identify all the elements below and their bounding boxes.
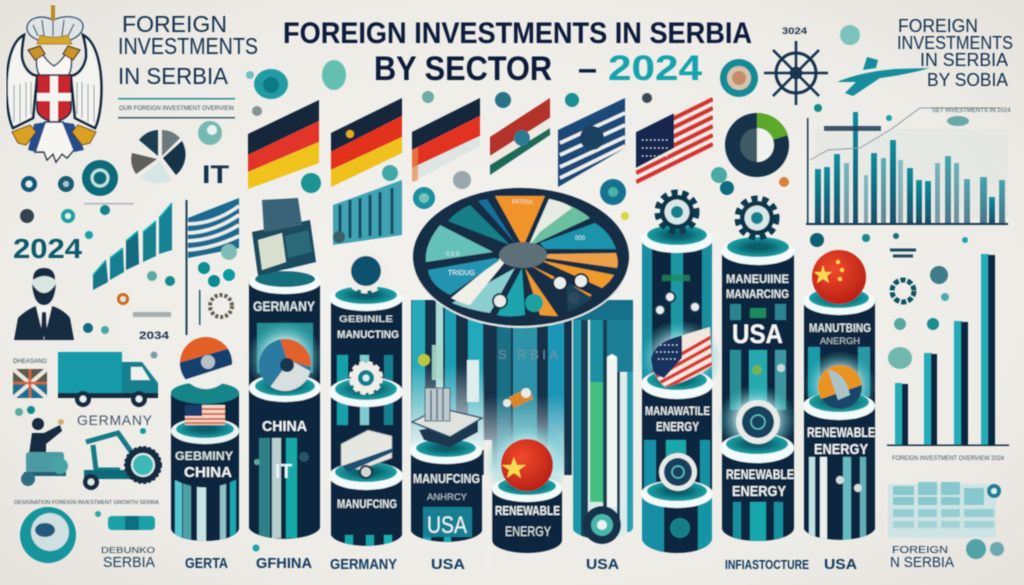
column 9: China manufacturing renewable xyxy=(803,250,876,550)
heading: main title xyxy=(283,17,752,88)
disc xyxy=(413,190,629,328)
labels: bottom sector row xyxy=(185,555,857,573)
icon: Serbian eagle emblem xyxy=(7,5,101,162)
column 7: gears USA flag energy: ENERGY xyxy=(656,419,699,434)
label: Serbia bottom left: SERBIA xyxy=(103,554,155,571)
heading: main title: BY SECTOR xyxy=(374,50,552,88)
column 1: Germany China: CHINA xyxy=(184,464,232,481)
icon: small top marks xyxy=(711,25,968,369)
icon: flag tile: DHEASANG xyxy=(13,359,47,365)
chart: central pie disc and base xyxy=(405,188,633,570)
text: 3024 top right: 3024 xyxy=(782,26,807,36)
heading: left subtitle: INVESTMENTS xyxy=(118,33,258,59)
heading: right subtitle: IN SERBIA xyxy=(920,50,1008,70)
labels: bottom sector row: GFHINA xyxy=(256,555,312,572)
column 2: Germany China IT: CHINA xyxy=(262,418,307,435)
heading: left subtitle: IN SERBIA xyxy=(118,63,229,89)
column 3: manufacturing: MANUCTING xyxy=(337,329,399,341)
icon: pill xyxy=(108,516,155,530)
heading: main title: 2024 xyxy=(608,49,703,88)
heading: right subtitle: FOREIGN xyxy=(898,16,978,36)
column 6: USA pillars xyxy=(572,320,633,560)
column 5: China ball and renewable energy: ENERGY xyxy=(505,523,552,539)
chart: small pie xyxy=(131,130,186,183)
chart: central pie disc and base: 0 0 0 xyxy=(446,252,460,258)
labels: bottom sector row: USA xyxy=(431,556,465,573)
text rule: small caption: DESIGNATION FOREIGN INVESTMENT GROWTH SERBIA xyxy=(14,500,159,506)
column 8: gears USA renewable: MANEUIINE xyxy=(726,272,789,286)
icon: flag tile xyxy=(13,359,47,398)
column 7: gears USA flag energy: MANAWATILE xyxy=(645,404,710,418)
column 2: Germany China IT xyxy=(247,270,323,552)
flag: striped blue xyxy=(558,98,625,187)
table: bottom right xyxy=(888,482,1004,559)
labels: bottom sector row: USA xyxy=(824,556,857,573)
label: Serbia bottom left: DEBUNKO xyxy=(101,546,155,555)
icons: hanging circles: 2034 xyxy=(139,330,170,342)
label: foreign in Serbia bottom right xyxy=(890,545,954,571)
icon: truck xyxy=(58,352,158,407)
icon: plane xyxy=(837,57,930,96)
divider: left vertical rule xyxy=(186,200,188,335)
Serbia label on base: S RBIA xyxy=(498,347,558,362)
heading: main title: FOREIGN INVESTMENTS IN SERBIA xyxy=(283,17,752,50)
chart: central pie disc and base: PATRIA xyxy=(512,200,533,206)
heading: right subtitle: INVESTMENTS xyxy=(897,33,1013,53)
column 1: Germany China: GEBMINY xyxy=(175,449,233,463)
column 7: gears USA flag energy xyxy=(638,193,722,568)
label: foreign in Serbia bottom right: N SERBIA xyxy=(890,554,954,571)
stripes under disc xyxy=(405,300,633,570)
chart: central pie disc and base: TRIDUG xyxy=(448,270,475,277)
column 4: manufacturing USA: USA xyxy=(427,512,467,539)
chart: top right bars xyxy=(806,108,1011,225)
heading: left subtitle xyxy=(118,11,258,118)
icon: person on machine xyxy=(15,406,68,486)
column 3: manufacturing: MANUFCING xyxy=(337,497,397,511)
labels: bottom sector row: GERTA xyxy=(185,555,228,572)
heading: right subtitle: BY SOBIA xyxy=(927,70,1008,90)
labels: bottom sector row: INFIASTOCTURE xyxy=(725,557,809,572)
labels: bottom sector row: USA xyxy=(586,556,619,573)
column 8: gears USA renewable: USA xyxy=(732,319,783,349)
column 1: Germany China xyxy=(171,337,239,552)
chart: bottom right bars xyxy=(887,254,1009,462)
column 8: gears USA renewable: MANARCING xyxy=(726,287,789,301)
column 8: gears USA renewable: RENEWABLE xyxy=(726,466,794,482)
column 8: gears USA renewable xyxy=(717,199,797,550)
flag: Germany 1 xyxy=(248,100,319,189)
column 4: manufacturing USA: MANUFCING xyxy=(413,471,480,486)
icons: left small decorations xyxy=(20,60,652,239)
flag: Germany 3 xyxy=(412,98,480,182)
chart: bottom right bars: FOREIGN INVESTMENT OVERVIEW 2024 xyxy=(892,456,1005,462)
icons: hanging circles xyxy=(83,244,237,342)
labels: bottom sector row: GERMANY xyxy=(330,556,397,573)
label: Germany left: GERMANY xyxy=(77,412,153,428)
column 9: China manufacturing renewable: MANUTBING xyxy=(809,321,871,335)
icon: large teal disc xyxy=(20,507,101,563)
text: 2024 left: 2024 xyxy=(13,233,82,264)
chart: top right bars: SET INVESTMENTS IN 2024 xyxy=(932,108,1011,114)
icon: coin xyxy=(720,59,758,97)
column 4: manufacturing USA: ANHRCY xyxy=(427,492,467,502)
column 4: manufacturing USA xyxy=(410,345,482,550)
flag: Germany 2 xyxy=(331,98,402,187)
label: foreign in Serbia bottom right: FOREIGN xyxy=(892,545,948,556)
heading: main title: – xyxy=(578,50,597,88)
column 2: Germany China IT: GERMANY xyxy=(253,298,316,314)
flag: tricolour xyxy=(490,98,550,175)
column 3: manufacturing: GEBINILE xyxy=(339,314,393,324)
column 2: Germany China IT: IT xyxy=(275,461,292,483)
heading: right subtitle xyxy=(897,16,1013,90)
icon: ship wheel xyxy=(764,41,828,105)
icon: server stack xyxy=(252,198,316,276)
chart: central pie disc and base: 000 xyxy=(575,236,586,242)
chart: left rising bars xyxy=(93,203,172,290)
icon: wavy flag xyxy=(188,198,239,258)
column 5: China ball and renewable energy xyxy=(485,420,569,558)
column 3: manufacturing xyxy=(329,165,403,553)
column 9: China manufacturing renewable: ENERGY xyxy=(814,441,868,458)
chart: top right donut xyxy=(725,113,789,177)
icon: businessman xyxy=(14,268,74,340)
heading: left subtitle: FOREIGN xyxy=(122,11,227,37)
column 9: China manufacturing renewable: RENEWABLE xyxy=(807,424,875,440)
flag: USA large xyxy=(636,94,713,188)
icon: excavator wheel xyxy=(83,428,161,490)
label: Serbia bottom left xyxy=(101,546,155,571)
column 9: China manufacturing renewable: ANERGH xyxy=(820,336,860,346)
heading: left subtitle: OUR FOREIGN INVESTMENT OVERVIEW xyxy=(119,105,235,112)
column 8: gears USA renewable: ENERGY xyxy=(732,483,786,500)
label: IT: IT xyxy=(202,161,229,189)
column 5: China ball and renewable energy: RENEWABLE xyxy=(495,503,560,518)
